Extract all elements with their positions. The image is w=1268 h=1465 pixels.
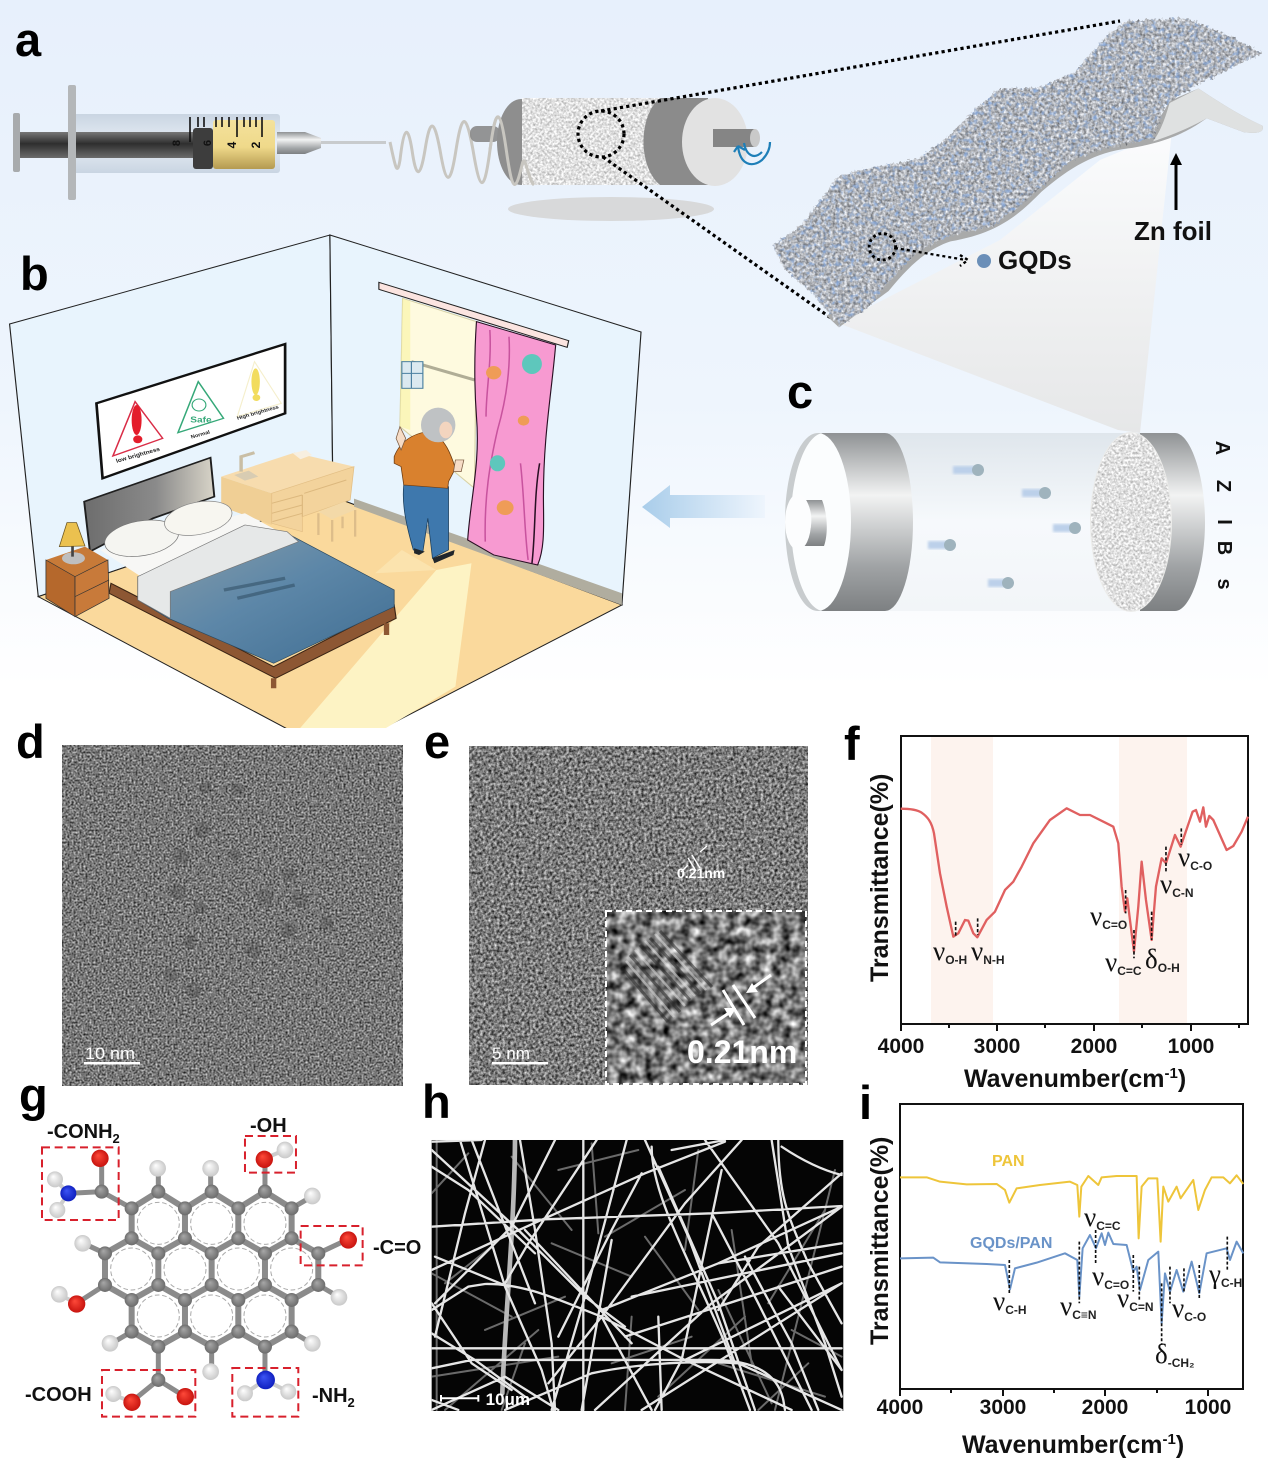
- peak labels i: C-H: [1221, 1276, 1242, 1290]
- functional group labels: -NH: [312, 1385, 348, 1407]
- functional group boxes: [42, 1136, 363, 1417]
- GQD particles: [928, 464, 1081, 589]
- curve labels i: GQDs/PAN: [970, 1235, 1052, 1252]
- label f: f: [844, 717, 860, 770]
- functional group labels: [25, 1115, 421, 1410]
- label i: i: [859, 1076, 872, 1129]
- oxygen atoms: [68, 1150, 357, 1411]
- bright fibres: [432, 1140, 842, 1410]
- peak markers: [1009, 1230, 1227, 1345]
- scale bar d: 10 nm: [85, 1044, 135, 1063]
- peak labels i: ν: [1117, 1283, 1129, 1313]
- GQD fibre film: [773, 18, 1263, 326]
- peak labels f: C=C: [1117, 964, 1142, 978]
- curtain: [468, 322, 556, 565]
- peak labels i: δ: [1155, 1339, 1168, 1369]
- peak labels i: ν: [1092, 1261, 1104, 1291]
- label h: h: [422, 1075, 451, 1128]
- functional group labels: -C=O: [373, 1237, 421, 1259]
- label g: g: [19, 1068, 48, 1121]
- headboard: [84, 458, 214, 552]
- person at window: [394, 408, 464, 563]
- panel i: FTIR comparison: [859, 1076, 1243, 1459]
- peak labels i: ν: [993, 1286, 1005, 1316]
- peak labels f: ν: [1105, 947, 1117, 977]
- tick labels i: [877, 1396, 1231, 1419]
- desk: [221, 450, 354, 532]
- peak labels i: C≡N: [1072, 1308, 1097, 1322]
- tick labels i: 3000: [980, 1396, 1026, 1419]
- tick labels f: 1000: [1168, 1035, 1214, 1058]
- hydrogen atoms: [47, 1142, 347, 1402]
- battery: [785, 432, 1205, 612]
- peak labels i: ν: [1172, 1293, 1184, 1323]
- label AZIBs: A: [1211, 441, 1233, 455]
- peak labels i: C-O: [1184, 1310, 1206, 1324]
- peak labels f: O-H: [1158, 961, 1180, 975]
- inset: 0.21nm: [687, 1034, 797, 1070]
- peak labels i: γ: [1209, 1259, 1221, 1289]
- wall poster: low brightness: [115, 446, 162, 465]
- label AZIBs: [1211, 441, 1235, 590]
- dotted zoom circle: [578, 111, 624, 157]
- axis titles i: Wavenumber(cm: [962, 1431, 1163, 1459]
- panel g: molecule: [19, 1068, 421, 1417]
- tick labels i: 1000: [1185, 1396, 1231, 1419]
- lattice annotation: [677, 846, 725, 881]
- axis titles f: Wavenumber(cm: [964, 1065, 1165, 1093]
- wall poster: Safe: [190, 416, 212, 424]
- nightstand and lamp: [46, 523, 109, 617]
- substituent bonds: [68, 1158, 347, 1402]
- arrow to foil: [1174, 158, 1178, 210]
- peak labels f: ν: [1178, 842, 1190, 872]
- panel i: FTIR comparison: Transmittance(%): [866, 1137, 894, 1345]
- label GQDs: GQDs: [998, 245, 1072, 275]
- peak labels f: [933, 842, 1212, 978]
- icon: syringe: [13, 85, 386, 200]
- panel d: TEM image: [16, 715, 403, 1086]
- peak labels i: C=C: [1096, 1219, 1121, 1233]
- label c: c: [787, 365, 813, 418]
- peak labels f: ν: [1090, 901, 1102, 931]
- drum shadow: [508, 197, 714, 221]
- panel b: bedroom: [10, 235, 641, 754]
- plot i: [900, 1104, 1243, 1396]
- nitrogen atoms: [60, 1185, 275, 1389]
- plot f: [901, 736, 1248, 1031]
- axis titles f: ): [1178, 1065, 1186, 1093]
- page background: [0, 0, 1268, 730]
- dotted zoom lines: [601, 21, 1120, 323]
- functional group labels: -COOH: [25, 1384, 92, 1406]
- panel f: FTIR: [844, 717, 1248, 1093]
- icon: rotation arrow: [734, 142, 770, 164]
- jet spiral: [390, 117, 522, 184]
- peak labels f: ν: [1160, 869, 1172, 899]
- icon: syringe: 8: [171, 140, 183, 146]
- peak labels i: -CH₂: [1168, 1356, 1194, 1370]
- peak labels f: ν: [933, 936, 945, 966]
- peak labels f: C-O: [1190, 859, 1212, 873]
- label e: e: [424, 715, 450, 768]
- peak labels i: C-H: [1005, 1303, 1027, 1317]
- carbon atoms: [95, 1185, 325, 1387]
- icon: GQD dot: [977, 254, 991, 268]
- axis titles i: ): [1176, 1431, 1184, 1459]
- label a: a: [15, 13, 42, 66]
- tick labels i: 2000: [1082, 1396, 1128, 1419]
- panel a: electrospinning: [13, 13, 1120, 323]
- peak labels f: δ: [1145, 944, 1158, 974]
- particles d: [163, 781, 334, 998]
- functional group labels: -CONH: [47, 1121, 113, 1143]
- scale bar e: [492, 1044, 548, 1064]
- peak labels f: C=O: [1102, 918, 1127, 932]
- peak labels f: C-N: [1172, 886, 1194, 900]
- floor: [37, 498, 623, 728]
- tick labels i: 4000: [877, 1396, 923, 1419]
- scale bar e: 5 nm: [492, 1044, 530, 1063]
- label Zn foil: Zn foil: [1134, 216, 1212, 246]
- peak labels f: ν: [971, 936, 983, 966]
- tick labels f: 3000: [974, 1035, 1020, 1058]
- bed: [100, 496, 396, 688]
- GQDs/PAN curve: [900, 1233, 1243, 1323]
- window: [400, 298, 476, 488]
- label AZIBs: Z: [1212, 480, 1234, 492]
- dim fibres: [432, 1140, 842, 1410]
- curtain rail: [379, 282, 569, 347]
- curve labels i: [970, 1153, 1052, 1252]
- collector drum: [470, 98, 760, 186]
- peak labels f: N-H: [983, 953, 1005, 967]
- icon: syringe: 6: [202, 140, 214, 146]
- peak labels i: C=O: [1104, 1278, 1129, 1292]
- functional group labels: 2: [348, 1395, 355, 1410]
- panel e: HRTEM image: [424, 715, 808, 1085]
- micrograph h: [432, 1140, 843, 1411]
- panel h: nanofibre SEM: [422, 1075, 843, 1411]
- label AZIBs: B: [1213, 541, 1235, 555]
- axis titles i: -1: [1163, 1431, 1176, 1448]
- peak labels i: ν: [1060, 1291, 1072, 1321]
- wall poster: High brightness: [236, 405, 280, 422]
- GQD callout arrow: [895, 248, 968, 266]
- panel f: FTIR: Transmittance(%): [866, 774, 894, 982]
- tick labels f: [878, 1035, 1214, 1058]
- wall poster: Normal: [190, 430, 211, 440]
- arrow to room: [642, 485, 765, 528]
- panel c: beam from foil to battery: [642, 18, 1263, 612]
- functional group labels: 2: [113, 1131, 120, 1146]
- inset: [606, 911, 806, 1084]
- peak labels i: C=N: [1129, 1300, 1154, 1314]
- carbon bonds: [105, 1192, 318, 1347]
- peak labels i: [993, 1202, 1242, 1370]
- peak labels f: O-H: [945, 953, 967, 967]
- Zn foil tail: [827, 89, 1263, 327]
- label b: b: [20, 247, 49, 300]
- tick labels f: 2000: [1071, 1035, 1117, 1058]
- stool: [318, 502, 357, 542]
- lattice annotation: 0.21nm: [677, 865, 725, 881]
- functional group labels: -OH: [250, 1115, 287, 1137]
- spectra i: [900, 1175, 1243, 1345]
- micrograph d: [62, 745, 403, 1086]
- tick labels f: 4000: [878, 1035, 924, 1058]
- light cone: [838, 130, 1172, 433]
- icon: syringe: 2: [249, 141, 263, 148]
- label AZIBs: s: [1213, 578, 1235, 590]
- micrograph e: [469, 746, 808, 1085]
- icon: syringe: 4: [225, 141, 239, 148]
- walls: [10, 235, 641, 605]
- peak labels i: ν: [1084, 1202, 1096, 1232]
- wall poster: [96, 344, 285, 478]
- label AZIBs: I: [1213, 519, 1235, 525]
- label d: d: [16, 715, 45, 768]
- aromatic ring circles: [111, 1202, 313, 1337]
- axis titles f: -1: [1165, 1065, 1178, 1082]
- jet over drum: [490, 117, 534, 185]
- scale bar h: [441, 1390, 530, 1409]
- scale bar h: 10μm: [486, 1390, 530, 1409]
- PAN curve: [900, 1175, 1243, 1242]
- spectrum curve f: [901, 807, 1248, 958]
- curve labels i: PAN: [992, 1153, 1025, 1170]
